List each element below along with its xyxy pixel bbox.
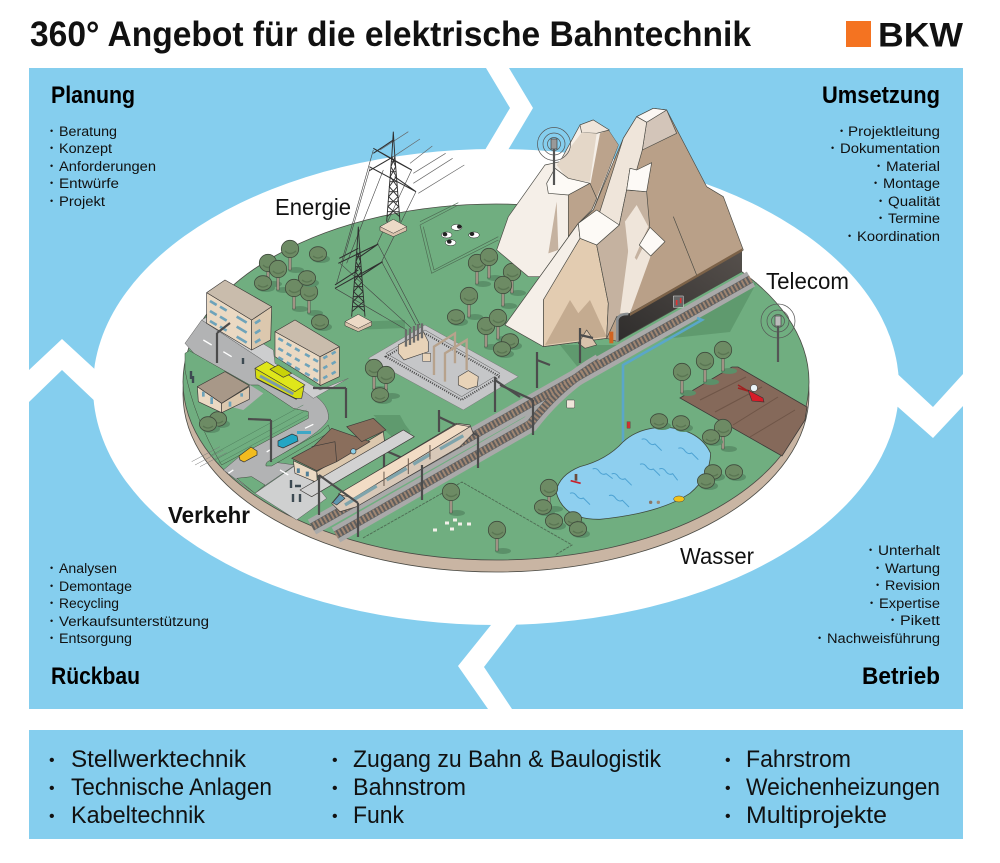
panel: Betrieb: • bbox=[870, 598, 873, 608]
panel: Betrieb: Betrieb bbox=[862, 663, 940, 690]
panel: Rückbau: Demontage bbox=[59, 579, 132, 595]
mast poles behind train bbox=[384, 410, 477, 470]
bottom services panel: • bbox=[725, 752, 731, 769]
bottom services panel: Multiprojekte bbox=[746, 802, 887, 829]
panel: Betrieb: Pikett bbox=[900, 613, 940, 629]
bottom services panel: Funk bbox=[353, 802, 405, 829]
panel: Umsetzung: Projektleitung bbox=[848, 124, 940, 140]
bottom services panel: Weichenheizungen bbox=[746, 774, 940, 801]
trees and bushes bbox=[199, 240, 746, 554]
panel: Planung: Beratung bbox=[59, 124, 117, 140]
panel: Umsetzung: Dokumentation bbox=[840, 141, 940, 157]
panel: Umsetzung: Qualität bbox=[888, 194, 940, 210]
bottom services panel: • bbox=[332, 752, 338, 769]
roads and town ground bbox=[185, 313, 348, 520]
bottom services panel: Zugang zu Bahn & Baulogistik bbox=[353, 746, 662, 773]
panel: Rückbau: Recycling bbox=[59, 596, 119, 612]
panel: Umsetzung: Material bbox=[886, 159, 940, 175]
panel: Umsetzung bbox=[822, 82, 940, 245]
people and sheep bbox=[191, 358, 471, 530]
panel: Rückbau: • bbox=[50, 616, 53, 626]
panel: Umsetzung: Umsetzung bbox=[822, 82, 940, 109]
panel: Betrieb: • bbox=[876, 580, 879, 590]
bottom services panel: • bbox=[332, 780, 338, 797]
bottom services panel bbox=[29, 730, 963, 839]
bottom services panel: • bbox=[725, 780, 731, 797]
panel: Planung: Entwürfe bbox=[59, 176, 119, 192]
pylons and power lines bbox=[335, 132, 464, 332]
bottom services panel: • bbox=[49, 752, 55, 769]
panel: Planung: • bbox=[50, 161, 53, 171]
buildings in town bbox=[197, 280, 339, 413]
panel: Umsetzung: Termine bbox=[888, 211, 940, 227]
blue process ring with white chevrons bbox=[29, 68, 963, 709]
fields: ploughed field bbox=[680, 367, 807, 456]
panel: Planung bbox=[50, 82, 156, 210]
panel: Planung: • bbox=[50, 178, 53, 188]
label: Wasser: Wasser bbox=[680, 543, 754, 569]
panel: Umsetzung: Montage bbox=[883, 176, 940, 192]
bottom services panel: Stellwerktechnik bbox=[71, 746, 247, 773]
pasture fence and cows bbox=[420, 203, 498, 273]
bottom services panel: Fahrstrom bbox=[746, 746, 851, 773]
panel: Planung: Planung bbox=[51, 82, 135, 109]
panel: Planung: Projekt bbox=[59, 194, 105, 210]
panel: Rückbau bbox=[50, 561, 209, 690]
panel: Betrieb: Wartung bbox=[885, 561, 940, 577]
panel: Betrieb: Unterhalt bbox=[878, 543, 940, 559]
panel: Rückbau: • bbox=[50, 633, 53, 643]
sheep pasture fence bbox=[363, 482, 572, 555]
panel: Umsetzung: • bbox=[840, 126, 843, 136]
label: Telecom: Telecom bbox=[766, 268, 849, 294]
panel: Umsetzung: • bbox=[879, 213, 882, 223]
panel: Betrieb: Revision bbox=[885, 578, 940, 594]
mountains with tunnel bbox=[497, 108, 743, 348]
panel: Umsetzung: Koordination bbox=[857, 229, 940, 245]
bottom services panel: Technische Anlagen bbox=[71, 774, 272, 801]
panel: Umsetzung: • bbox=[831, 143, 834, 153]
panel: Rückbau: • bbox=[50, 581, 53, 591]
bottom services panel: Bahnstrom bbox=[353, 774, 466, 801]
substation bbox=[368, 323, 518, 410]
lake bbox=[556, 400, 711, 519]
panel: Umsetzung: • bbox=[874, 178, 877, 188]
label: Energie: Energie bbox=[275, 194, 351, 220]
landscape disc bbox=[183, 204, 809, 572]
panel: Betrieb: • bbox=[869, 545, 872, 555]
bottom services panel: • bbox=[49, 808, 55, 825]
panel: Umsetzung: • bbox=[848, 231, 851, 241]
bottom services panel: • bbox=[725, 808, 731, 825]
cars and tractor bbox=[239, 384, 764, 462]
panel: Betrieb: Nachweisführung bbox=[827, 631, 940, 647]
BKW logo bbox=[846, 16, 964, 54]
panel: Betrieb: • bbox=[876, 563, 879, 573]
BKW logo: BKW bbox=[878, 16, 964, 54]
antenna: telecom bbox=[761, 304, 795, 362]
title: 360° Angebot für die elektrische Bahntechnik bbox=[30, 15, 751, 54]
water channel bbox=[623, 318, 702, 442]
panel: Betrieb: • bbox=[818, 633, 821, 643]
panel: Rückbau: Rückbau bbox=[51, 663, 140, 690]
panel: Planung: • bbox=[50, 143, 53, 153]
panel: Umsetzung: • bbox=[877, 161, 880, 171]
panel: Planung: • bbox=[50, 126, 53, 136]
station, platform and train bbox=[292, 415, 473, 512]
bottom services panel: • bbox=[49, 780, 55, 797]
bottom services panel: Kabeltechnik bbox=[71, 802, 206, 829]
panel: Rückbau: Verkaufsunterstützung bbox=[59, 614, 209, 630]
panel: Betrieb: Expertise bbox=[879, 596, 940, 612]
catenary masts bbox=[217, 323, 593, 537]
panel: Planung: Konzept bbox=[59, 141, 112, 157]
panel: Rückbau: Entsorgung bbox=[59, 631, 132, 647]
railway tracks bbox=[312, 279, 751, 535]
panel: Rückbau: Analysen bbox=[59, 561, 117, 577]
panel: Rückbau: • bbox=[50, 598, 53, 608]
panel: Betrieb: • bbox=[891, 615, 894, 625]
panel: Umsetzung: • bbox=[879, 196, 882, 206]
bottom services panel: • bbox=[332, 808, 338, 825]
panel: Planung: • bbox=[50, 196, 53, 206]
antenna: mountain bbox=[538, 128, 570, 185]
ground shadows bbox=[245, 282, 757, 437]
panel: Planung: Anforderungen bbox=[59, 159, 156, 175]
panel: Betrieb bbox=[818, 543, 940, 690]
panel: Rückbau: • bbox=[50, 563, 53, 573]
label: Verkehr: Verkehr bbox=[168, 502, 250, 528]
